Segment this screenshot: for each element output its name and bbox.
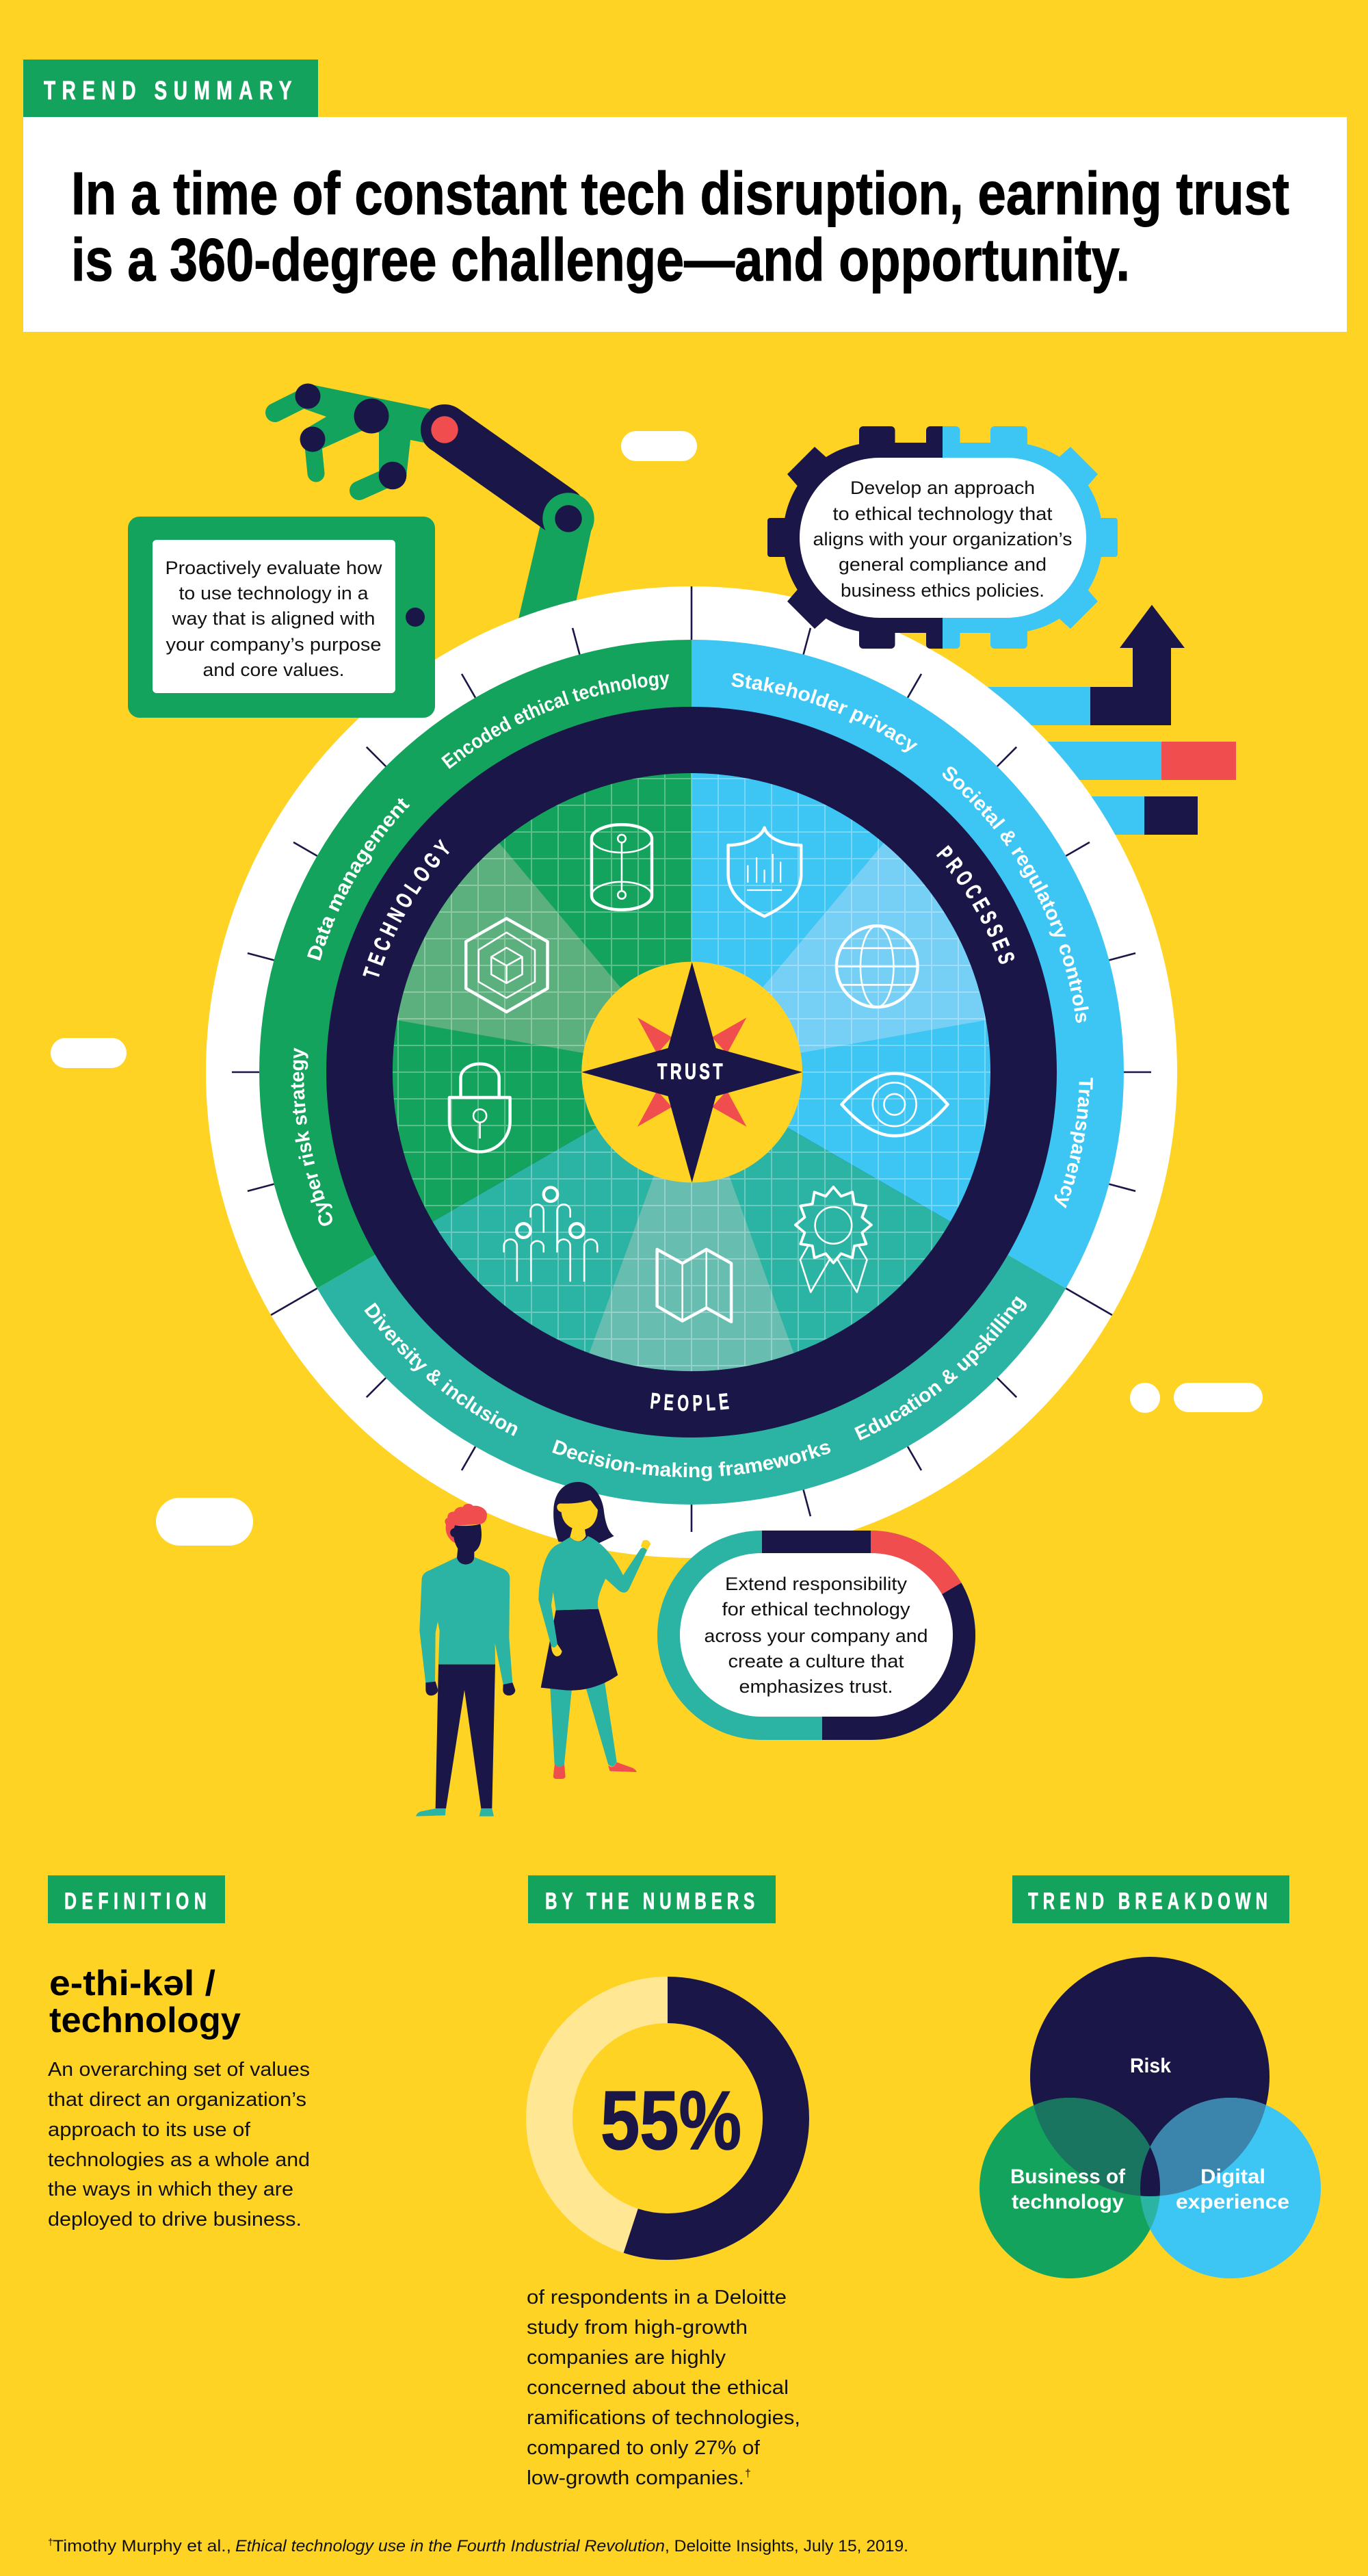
gear callout	[767, 426, 1118, 649]
icon: hexagon cube	[466, 918, 547, 1012]
venn label: digital experience	[1176, 2165, 1289, 2213]
compass disc	[581, 962, 802, 1182]
footnote	[48, 2536, 908, 2555]
blueprint grid	[393, 773, 990, 1371]
label: education and upskilling: Education & upskilling	[854, 1296, 1027, 1441]
gear callout: general compliance and	[839, 554, 1047, 575]
cloud pill: left	[51, 1038, 127, 1068]
label: technology: TECHNOLOGY	[363, 839, 449, 977]
icon: connected people	[504, 1187, 597, 1282]
definition text: the ways in which they are	[48, 2178, 293, 2200]
label: encoded ethical technology: Encoded ethical technology	[440, 674, 669, 769]
wheel ticks	[232, 586, 1151, 1532]
navy ring	[326, 707, 1057, 1437]
donut chart: 55%: 55%	[601, 2074, 741, 2167]
label: people: PEOPLE	[650, 1393, 729, 1411]
tablet callout: to use technology in a	[179, 583, 369, 603]
highlight wedge: people	[590, 1072, 793, 1371]
venn label: risk: Risk	[1130, 2055, 1171, 2077]
definition text: that direct an organization’s	[48, 2089, 306, 2111]
venn label: business of technology: technology	[1012, 2191, 1124, 2213]
inner sector: processes	[692, 773, 990, 1222]
gear callout: to ethical technology that	[833, 504, 1053, 524]
stadium callout: for ethical technology	[722, 1599, 910, 1619]
tablet callout: way that is aligned with	[171, 608, 375, 629]
person: woman	[538, 1482, 650, 1779]
footnote: Timothy Murphy et al.,	[53, 2537, 231, 2555]
curved labels: navy ring	[363, 822, 1014, 1411]
label: societal and regulatory controls: Societal & regulatory controls	[943, 766, 1089, 1023]
outer ring: people	[317, 1072, 1066, 1505]
icons and compass	[449, 824, 948, 1322]
wheel white rim	[206, 586, 1177, 1558]
tag: trend breakdown	[1012, 1875, 1289, 1923]
venn overlap: risk and business	[1034, 2098, 1157, 2196]
tag: by the numbers	[528, 1875, 776, 1923]
title banner	[23, 117, 1347, 332]
label: trust: TRUST	[657, 1059, 726, 1084]
stadium callout: emphasizes trust.	[739, 1676, 893, 1697]
venn diagram	[979, 1957, 1321, 2278]
tag: definition	[48, 1875, 225, 1923]
statistic text	[527, 2287, 800, 2489]
statistic text: of respondents in a Deloitte	[527, 2287, 787, 2308]
footnote: , Deloitte Insights, July 15, 2019.	[665, 2537, 908, 2555]
venn overlap: business and digital	[1141, 2196, 1160, 2229]
statistic text: compared to only 27% of	[527, 2437, 761, 2459]
venn label: digital experience: Digital	[1200, 2165, 1265, 2188]
icon: shield with chart	[728, 828, 801, 916]
venn overlap: risk and digital	[1140, 2098, 1266, 2196]
footnote: Ethical technology use in the Fourth Industrial Revolution	[235, 2537, 665, 2555]
venn center overlap	[1140, 2147, 1160, 2196]
icon: globe	[837, 926, 918, 1007]
tag: trend summary	[23, 60, 318, 117]
statistic text: companies are highly	[527, 2347, 726, 2369]
robot arm	[275, 383, 594, 657]
icon: cylinder	[592, 824, 652, 910]
highlight wedge: technology	[397, 843, 692, 1072]
icon: padlock	[449, 1064, 510, 1152]
label: transparency: Transparency	[1055, 1078, 1093, 1208]
footnote: †	[48, 2536, 53, 2547]
donut chart: 55%	[549, 2000, 786, 2237]
definition heading: e-thi-kəl /	[49, 1964, 215, 2003]
venn label: digital experience: experience	[1176, 2191, 1289, 2213]
cloud pill: lower left	[156, 1498, 253, 1546]
tablet callout: and core values.	[202, 660, 345, 680]
statistic text: low-growth companies.	[527, 2467, 744, 2489]
stadium callout: Extend responsibility	[725, 1574, 908, 1594]
highlight wedge: processes	[692, 843, 986, 1072]
icon: award rosette	[795, 1187, 871, 1292]
tag: trend summary: TREND SUMMARY	[44, 77, 298, 105]
statistic text: concerned about the ethical	[527, 2377, 789, 2399]
label: decision-making frameworks: Decision-making frameworks	[552, 1440, 830, 1481]
trust wheel	[206, 586, 1177, 1558]
compass red points	[637, 1017, 746, 1127]
tablet callout: Proactively evaluate how	[166, 558, 382, 578]
label: diversity and inclusion: Diversity & inclusion	[364, 1303, 517, 1436]
tag: definition: DEFINITION	[64, 1888, 211, 1914]
statistic text: ramifications of technologies,	[527, 2407, 800, 2429]
venn label: business of technology: Business of	[1010, 2165, 1126, 2188]
venn circle: digital experience	[1140, 2098, 1321, 2278]
definition heading	[49, 1964, 241, 2040]
gear callout: Develop an approach	[850, 478, 1035, 498]
curved labels: outer ring	[291, 673, 1093, 1509]
statistic text: study from high-growth	[527, 2317, 748, 2339]
venn circle: business of technology	[979, 2098, 1160, 2278]
gear left half	[767, 426, 943, 649]
gear callout: aligns with your organization’s	[813, 529, 1073, 549]
stadium callout: create a culture that	[728, 1651, 904, 1671]
stadium callout: across your company and	[705, 1626, 928, 1646]
statistic text: †	[745, 2468, 751, 2480]
tablet callout	[128, 517, 435, 718]
gear right half	[943, 426, 1118, 649]
outer ring: technology	[259, 640, 692, 1288]
title banner: is a 360-degree challenge—and opportunity.	[71, 226, 1130, 294]
definition text: approach to its use of	[48, 2119, 251, 2141]
inner sector: people	[432, 1072, 951, 1371]
tag: by the numbers: BY THE NUMBERS	[545, 1888, 759, 1914]
inner sector: technology	[393, 773, 692, 1222]
stadium callout	[657, 1531, 975, 1740]
venn label: business of technology	[1010, 2165, 1126, 2213]
bar chart with rising arrow	[958, 605, 1236, 835]
label: cyber risk strategy: Cyber risk strategy	[291, 1048, 332, 1226]
compass star	[581, 962, 802, 1182]
outer ring: processes	[692, 640, 1124, 1288]
gear callout: business ethics policies.	[841, 580, 1044, 601]
cloud dot and pill: right	[1130, 1383, 1263, 1413]
definition text	[48, 2059, 310, 2230]
definition heading: technology	[49, 2001, 241, 2040]
definition text: An overarching set of values	[48, 2059, 310, 2081]
tablet callout: your company’s purpose	[166, 634, 382, 655]
icon: eye	[842, 1074, 948, 1136]
label: stakeholder privacy: Stakeholder privacy	[731, 673, 918, 753]
tag: trend breakdown: TREND BREAKDOWN	[1028, 1888, 1272, 1914]
label: processes: PROCESSES	[936, 845, 1014, 964]
icon: map	[657, 1249, 731, 1322]
label: data management: Data management	[307, 798, 410, 961]
definition text: deployed to drive business.	[48, 2209, 302, 2230]
cloud pill: top	[621, 431, 697, 461]
definition text: technologies as a whole and	[48, 2149, 310, 2171]
person: man	[416, 1504, 515, 1817]
venn circle: risk	[1030, 1957, 1270, 2196]
